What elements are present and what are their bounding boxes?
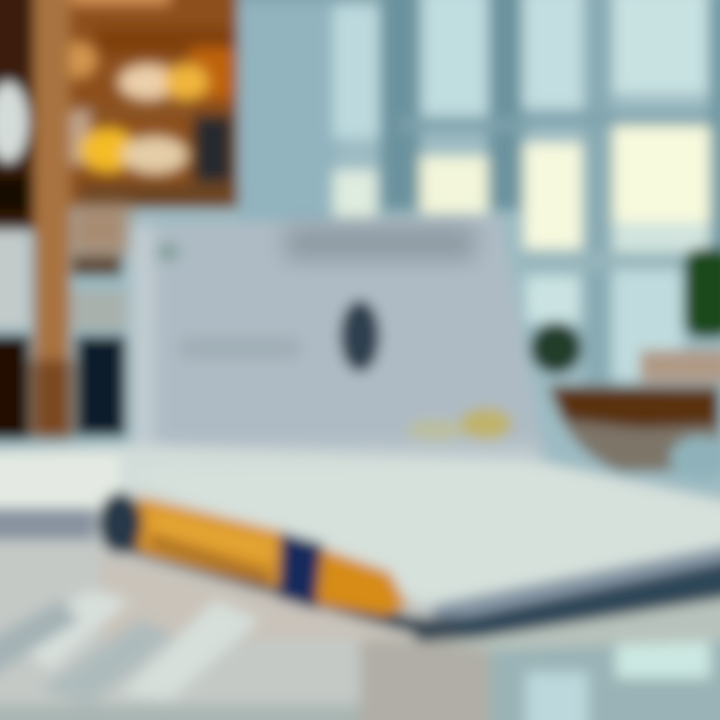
desk surface xyxy=(0,445,720,720)
window panes xyxy=(333,0,720,400)
shelf: wooden shelving at left xyxy=(0,0,238,440)
plant and bowl on right xyxy=(530,248,720,480)
pen xyxy=(98,492,460,632)
paper document on desk xyxy=(132,215,548,475)
left window gaps xyxy=(0,82,28,162)
pen tip xyxy=(316,548,408,616)
background: window wall xyxy=(238,0,720,400)
notebook xyxy=(125,462,720,642)
emblem on paper xyxy=(340,300,380,372)
floor reflections xyxy=(0,540,500,720)
pen end cap xyxy=(98,492,142,554)
pen band xyxy=(278,532,324,610)
wooden post xyxy=(34,0,70,435)
highlighted mark xyxy=(460,408,512,440)
